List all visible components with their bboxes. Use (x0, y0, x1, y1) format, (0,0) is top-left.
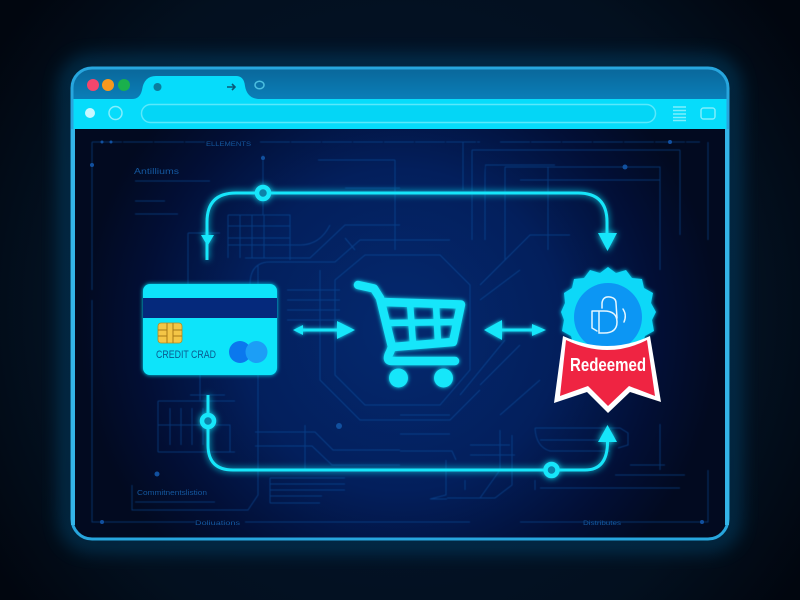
title bar (71, 67, 729, 100)
active browser tab (132, 76, 258, 99)
icon: menu (673, 107, 686, 120)
toolbar (71, 99, 729, 129)
ribbon (554, 336, 661, 413)
redeemed badge (554, 267, 661, 413)
arrow: cart to badge (484, 320, 546, 340)
bottom left node (202, 415, 214, 427)
label: top header: ELLEMENTS (206, 142, 251, 148)
redeemed label: Redeemed (570, 355, 646, 375)
arrow: bottom flow to badge (202, 395, 617, 476)
icon: chip (158, 323, 182, 343)
credit card (143, 284, 277, 375)
label: top left heading: Antilliums (134, 166, 179, 176)
top right arrowhead (598, 233, 617, 251)
icon: card brand circles (229, 341, 268, 363)
icon: window (701, 108, 715, 119)
icon: tab arrow (227, 84, 235, 90)
arrow: top flow from card to badge (201, 187, 617, 260)
arrow: card to cart (293, 321, 355, 339)
top left arrowhead (201, 235, 214, 246)
label: bottom header: Doliuations (195, 521, 240, 527)
window frame (72, 68, 728, 539)
card label: CREDIT CRAD (156, 349, 216, 361)
seal (561, 267, 656, 361)
window control dots (87, 79, 130, 91)
icon: new tab (255, 81, 264, 89)
label: bottom left caption: Commitnentslistion (137, 488, 207, 497)
card stripe (143, 298, 277, 318)
icon: tab favicon (154, 83, 162, 91)
circuit board background (92, 142, 708, 522)
browser window (71, 67, 729, 539)
bottom right arrowhead (598, 425, 617, 442)
circuit nodes (90, 140, 704, 524)
icon: open lock (592, 297, 625, 333)
small technical labels (134, 142, 621, 527)
toolbar controls (85, 104, 715, 122)
address bar (142, 104, 656, 122)
top node (257, 187, 269, 199)
icon: shopping cart (358, 285, 461, 388)
bottom right node (546, 464, 558, 476)
label: bottom right header: Distributes (583, 521, 621, 527)
